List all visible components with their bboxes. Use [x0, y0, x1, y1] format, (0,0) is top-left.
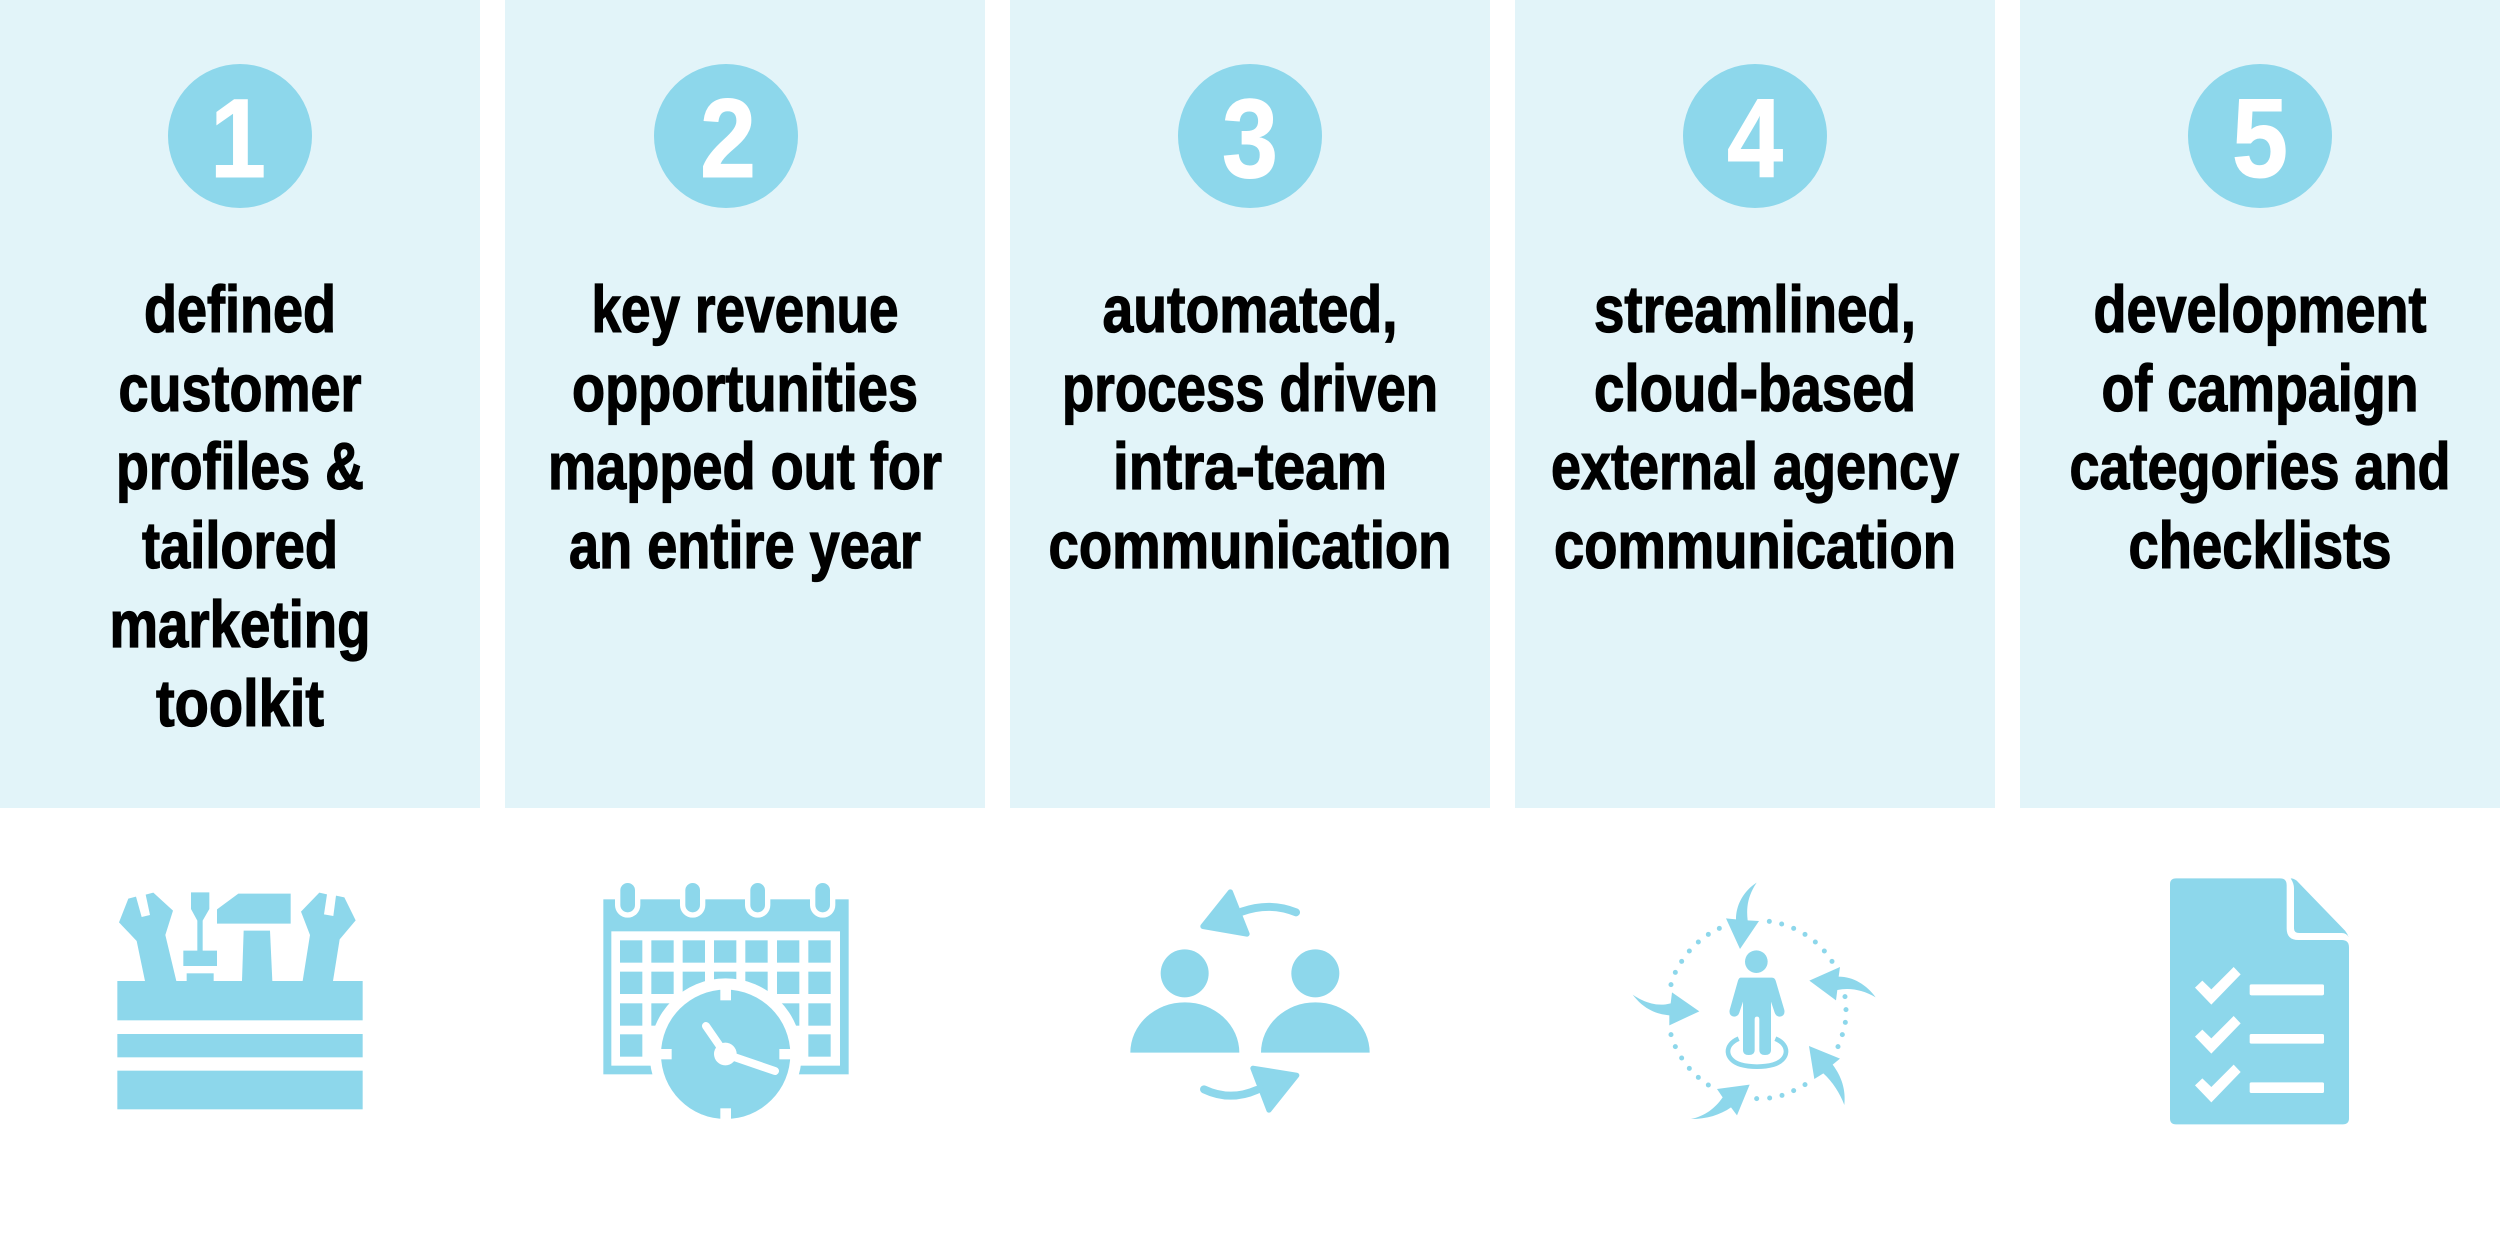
- number badge 1: [168, 64, 312, 208]
- number badge 5: [2188, 64, 2332, 208]
- text: step 1 description: defined: [144, 272, 336, 346]
- text: step 5 description: development: [2094, 272, 2427, 346]
- text: step 4 description: communication: [1554, 508, 1956, 582]
- panel: step 4: [1515, 0, 1995, 808]
- text: step 2 description: [548, 272, 942, 582]
- text: step 5 description: of campaign: [2102, 351, 2418, 425]
- panel: step 2: [505, 0, 985, 808]
- number badge 3: 3: [1222, 76, 1278, 201]
- number badge 5: 5: [2232, 76, 2288, 201]
- text: step 4 description: [1551, 272, 1959, 582]
- icon: calendar with clock: [603, 880, 849, 1130]
- text: step 4 description: external agency: [1551, 429, 1959, 503]
- icon: two people exchanging: [1130, 892, 1370, 1110]
- text: step 1 description: toolkit: [156, 666, 324, 740]
- number badge 4: 4: [1727, 76, 1783, 201]
- number badge 2: 2: [700, 76, 756, 201]
- text: step 3 description: communication: [1048, 508, 1452, 582]
- panel: step 1: [0, 0, 480, 808]
- text: step 3 description: process driven: [1062, 351, 1438, 425]
- text: step 2 description: an entire year: [569, 508, 921, 582]
- panel: step 3: [1010, 0, 1490, 808]
- text: step 1 description: [110, 272, 370, 740]
- text: step 1 description: profiles &: [116, 429, 364, 503]
- text: step 1 description: tailored: [142, 508, 338, 582]
- number badge 4: [1683, 64, 1827, 208]
- text: step 2 description: key revenue: [592, 272, 898, 346]
- text: step 4 description: streamlined,: [1594, 272, 1916, 346]
- panel: step 5: [2020, 0, 2500, 808]
- text: step 1 description: customer: [118, 351, 362, 425]
- text: step 5 description: checklists: [2128, 508, 2392, 582]
- number badge 1: 1: [210, 76, 266, 201]
- icon: checklist document: [2170, 878, 2349, 1124]
- text: step 3 description: automated,: [1102, 272, 1398, 346]
- text: step 2 description: mapped out for: [548, 429, 942, 503]
- text: step 2 description: opportunities: [572, 351, 918, 425]
- icon: person surrounded by arrows: [1633, 883, 1876, 1119]
- text: step 3 description: intra-team: [1113, 429, 1387, 503]
- icon: toolbox: [117, 892, 363, 1109]
- number badge 3: [1178, 64, 1322, 208]
- text: step 4 description: cloud-based: [1594, 351, 1916, 425]
- number badge 2: [654, 64, 798, 208]
- text: step 1 description: marketing: [110, 587, 370, 661]
- text: step 5 description: [2070, 272, 2450, 582]
- text: step 3 description: [1048, 272, 1452, 582]
